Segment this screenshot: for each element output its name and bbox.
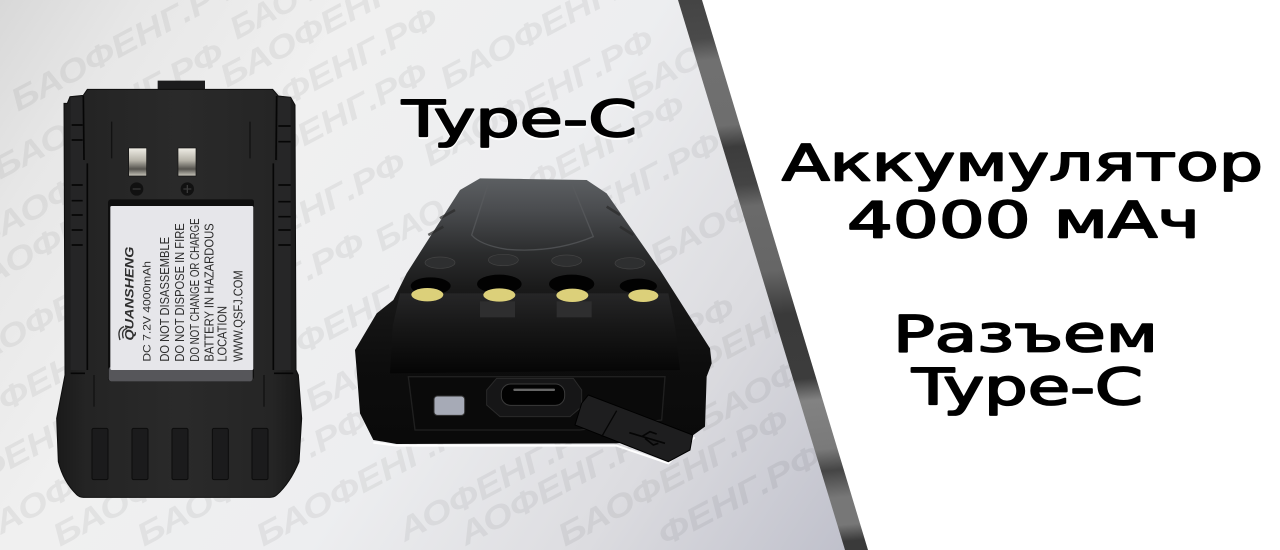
- metal contacts: [129, 148, 196, 196]
- background: grey gradient panel: [0, 0, 847, 550]
- subtitle: Разъем Type-C: Type-C: [911, 358, 1143, 416]
- battery label: DC 7.2V 4000mAh: [142, 261, 154, 362]
- battery label: LOCATION: [216, 306, 230, 362]
- battery bottom view: [355, 178, 712, 463]
- heading: Type-C over battery: Type-C: [401, 90, 637, 148]
- watermark pattern: БАО: [368, 191, 452, 258]
- Type-C port: [487, 378, 582, 417]
- watermark pattern: [0, 0, 818, 546]
- logo text: QUANSHENG: [122, 247, 136, 341]
- watermark pattern: БАОФЕНГ.РФ: [551, 401, 794, 550]
- battery label: WWW.QSFJ.COM: [232, 270, 246, 362]
- title: Аккумулятор 4000 мАч: 4000 мАч: [847, 192, 1200, 250]
- rubber port flap: [575, 395, 693, 462]
- watermark pattern: БАОФЕНГ.РФ: [200, 0, 443, 151]
- heading: Type-C over battery: [401, 90, 637, 150]
- watermark pattern: БАОФЕНГ.РФ: [215, 248, 458, 400]
- watermark pattern: БАОФЕНГ.РФ: [497, 289, 740, 441]
- subtitle: Разъем Type-C: [893, 306, 1158, 416]
- battery back view: [57, 81, 302, 497]
- watermark pattern: БАОФЕНГ.РФ: [416, 21, 659, 173]
- battery label: [110, 206, 253, 370]
- watermark pattern: БАОФЕНГ.РФ: [613, 267, 856, 419]
- battery label: DO NOT CHANGE OR CHARGE: [188, 218, 202, 362]
- gold contacts: [411, 275, 658, 317]
- watermark pattern: БАОФЕНГ.РФ: [689, 286, 932, 438]
- bottom grip slots: [92, 428, 268, 480]
- watermark pattern: БАОФЕНГ.РФ: [46, 401, 289, 550]
- watermark pattern: АОФЕНГ.РФ: [390, 408, 611, 549]
- indicator LED: [434, 396, 465, 415]
- watermark pattern: БАОФЕНГ.РФ: [127, 224, 370, 376]
- watermark pattern: БАОФЕНГ.РФ: [298, 266, 541, 418]
- heading: Type-C over battery: Type-C: [401, 92, 637, 150]
- battery latch tab: [158, 81, 205, 90]
- title: Аккумулятор 4000 мАч: [782, 134, 1263, 250]
- port panel: [408, 377, 665, 430]
- battery body: [57, 89, 302, 497]
- battery label: DO NOT DISASSEMBLE: [158, 237, 172, 362]
- usb symbol: [629, 432, 665, 445]
- subtitle: Разъем Type-C: Разъем: [893, 306, 1158, 364]
- front face: [390, 293, 680, 373]
- battery label: BATTERY IN HAZARDOUS: [202, 223, 216, 362]
- watermark pattern: БАОФЕНГ.РФ: [168, 144, 411, 296]
- battery body top: [355, 178, 712, 444]
- battery label: DO NOT DISPOSE IN FIRE: [173, 223, 187, 362]
- battery label recess: [108, 199, 254, 381]
- logo signal arcs: [119, 327, 127, 340]
- diagonal dark band: [678, 0, 868, 550]
- clip recess outline: [428, 183, 633, 250]
- watermark pattern: БАОФЕНГ.РФ: [249, 401, 492, 550]
- white cut-out edge: [373, 437, 695, 463]
- watermark pattern: БАОФЕНГ.РФ: [643, 121, 886, 273]
- title: Аккумулятор 4000 мАч: Аккумулятор: [782, 134, 1263, 192]
- side rails: [71, 96, 293, 407]
- watermark pattern: БАОФЕНГ.РФ: [190, 54, 433, 206]
- watermark pattern: БАОФЕНГ.РФ: [447, 87, 690, 239]
- watermark pattern: БАОФЕНГ.РФ: [130, 401, 373, 550]
- watermark pattern: БАОФЕНГ.РФ: [483, 124, 726, 276]
- watermark pattern: АОФЕНГ.РФ: [451, 412, 672, 550]
- terminal markings: [425, 254, 645, 269]
